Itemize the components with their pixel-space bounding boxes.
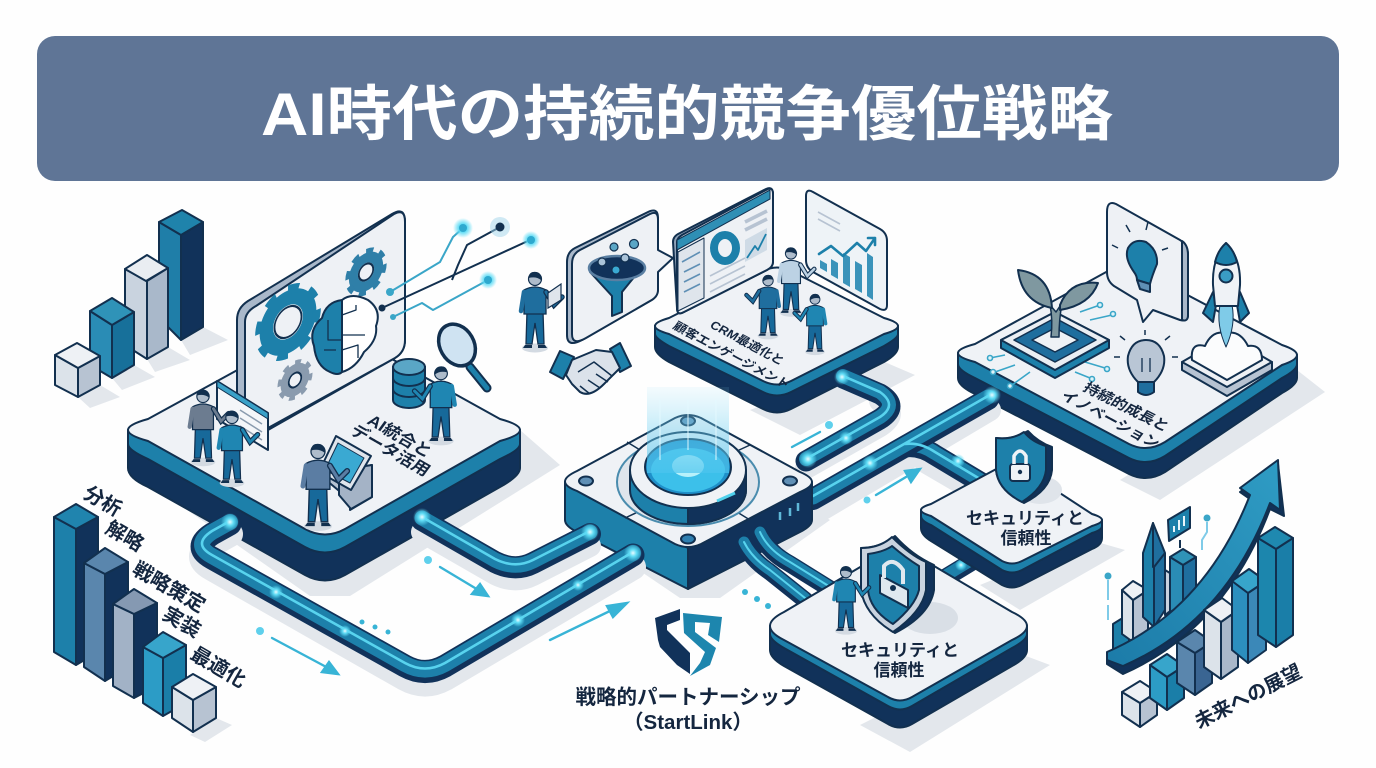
hub: central AI core	[565, 415, 830, 598]
dots: lower flow	[360, 620, 390, 634]
text: lower security label: 信頼性	[874, 661, 924, 680]
text: strategic partnership label: （StartLink）	[623, 711, 753, 734]
pipe: hub to lower security platform	[744, 532, 835, 600]
icon: CRM dashboard screen	[673, 188, 773, 313]
icon: funnel speech bubble	[567, 210, 673, 343]
icon: rocket launch	[1182, 243, 1272, 396]
text: process step labels: 解略	[102, 516, 148, 556]
panel: upper security platform base	[921, 464, 1125, 610]
chart: lower-left process stair bars	[54, 504, 232, 742]
bar: strategy	[113, 589, 157, 698]
pipe: lower to upper security platform	[945, 559, 973, 578]
pipe: CRM platform to hub	[799, 369, 890, 468]
chart: future outlook buildings and arrow	[1104, 460, 1293, 727]
panel: growth platform base	[958, 266, 1325, 500]
icon: lightbulb speech bubble	[1107, 203, 1188, 322]
text: process step labels: 戦略策定	[128, 557, 210, 617]
bar: interpretation	[84, 548, 128, 681]
text: AI platform label: AI統合と	[364, 411, 435, 461]
pipe: AI platform long route to hub	[202, 513, 642, 684]
arrow: middle-left flow	[424, 556, 488, 596]
text: growth platform label: 持続的成長と	[1080, 379, 1173, 435]
icon: grey gear	[280, 357, 310, 403]
text: upper security label	[966, 509, 1084, 548]
icon: small standing chart board	[217, 381, 268, 450]
text: CRM platform label: CRM最適化と	[707, 318, 788, 368]
figures: team on AI platform	[190, 366, 455, 531]
icon: brain	[312, 296, 378, 374]
text: upper security label: 信頼性	[1000, 529, 1052, 548]
text: lower security label: セキュリティと	[841, 641, 959, 660]
bar: analysis	[54, 504, 98, 665]
text: future outlook label: 未来への展望	[1191, 661, 1306, 733]
icon: big AI panel with gears and brain	[237, 211, 405, 430]
figures: CRM team	[746, 247, 826, 355]
arrow: CRM pipe flow	[792, 421, 833, 447]
icon: database with magnifier	[393, 317, 487, 408]
text: strategic partnership label	[575, 685, 801, 734]
icon: kiosk terminal	[319, 436, 372, 510]
bars: future steps	[1122, 527, 1293, 727]
text: process step labels: 分析	[80, 481, 126, 521]
flow arrows on background	[256, 421, 920, 674]
icon: StartLink shield logo	[655, 609, 722, 676]
dots: hub flow	[742, 589, 771, 609]
figure: woman at shield	[834, 566, 869, 635]
icon: small top gear	[348, 244, 384, 300]
icon: circuit lines with glowing nodes	[378, 217, 540, 320]
panel: lower security platform base	[770, 549, 1050, 752]
title banner	[37, 36, 1339, 181]
chart: top-left rising bars	[55, 210, 228, 408]
icon: lightbulb on platform	[1114, 330, 1178, 395]
text: CRM platform label: 顧客エンゲージメント	[670, 319, 793, 391]
arrow: security pipe flow	[864, 469, 920, 504]
icon: city buildings	[1104, 507, 1210, 654]
text: AI platform label: データ活用	[347, 421, 434, 480]
pipe: hub to growth platform with branch	[813, 386, 1001, 515]
pipe: AI platform short route to hub	[413, 508, 599, 579]
text: process step labels	[80, 481, 250, 692]
icon: CRM growth chart board	[806, 191, 887, 310]
figure: presenter with clipboard	[521, 272, 562, 352]
text: lower security label	[841, 641, 959, 680]
icon: handshake	[550, 343, 631, 394]
icon: chip with sprout	[988, 270, 1116, 388]
bar: implementation	[143, 632, 186, 716]
bar: optimisation	[172, 674, 216, 732]
icon: large gear	[259, 278, 317, 366]
text: process step labels: 最適化	[186, 642, 250, 692]
arrow: rising growth arrow	[1107, 460, 1284, 674]
text: strategic partnership label: 戦略的パートナーシップ	[575, 685, 801, 709]
arrow: lower-left flow	[256, 627, 338, 674]
icon: lower shield	[861, 536, 958, 634]
hub: holographic light beam	[647, 387, 729, 473]
text: process step labels: 実装	[158, 602, 205, 642]
panel: AI integration platform base	[128, 328, 560, 596]
panel: CRM platform base	[655, 268, 915, 435]
icon: upper shield	[996, 431, 1062, 504]
arrow: toward logo	[550, 603, 627, 640]
text: upper security label: セキュリティと	[966, 509, 1084, 528]
title banner: AI時代の持続的競争優位戦略	[261, 81, 1113, 148]
text: growth platform label: イノベーション	[1058, 388, 1163, 452]
